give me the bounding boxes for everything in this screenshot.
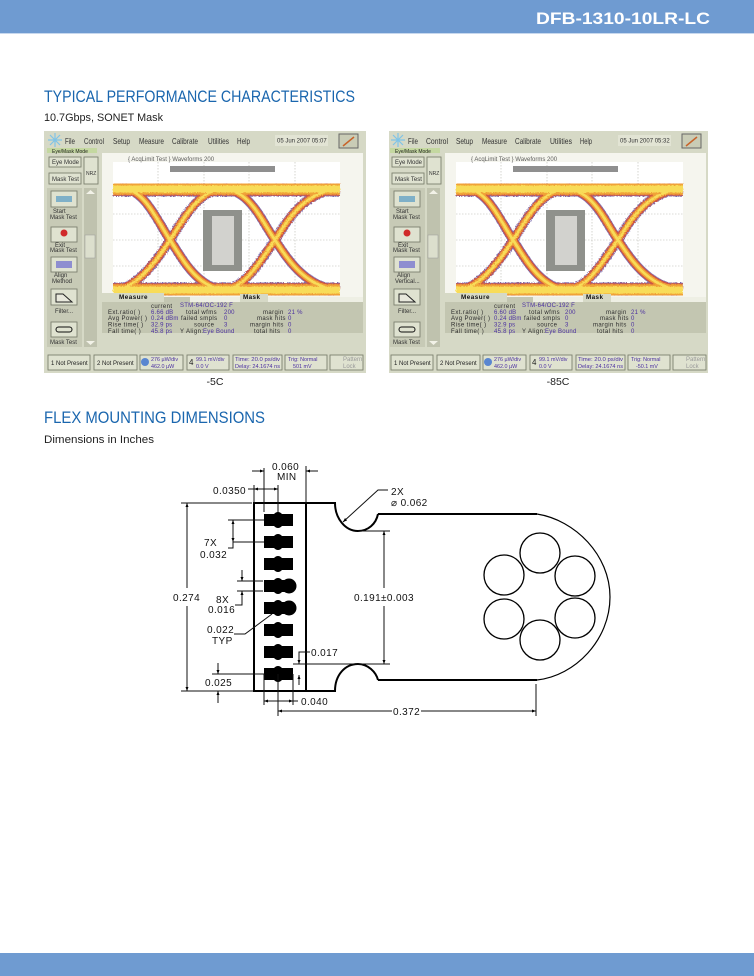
channel buttons: 4	[189, 358, 194, 367]
measurement panel: Avg Power( )	[451, 316, 490, 322]
measurement panel: 200	[224, 310, 235, 316]
measurement panel: 32.9 ps	[151, 322, 172, 328]
measurement panel: Measure	[461, 294, 490, 301]
channel buttons: Delay: 24.1674 ns	[235, 364, 280, 370]
measurement panel: 0	[288, 329, 292, 335]
icon: chart button	[339, 134, 358, 148]
channel buttons: 276 µW/div	[151, 357, 178, 363]
side controls: NRZ	[86, 171, 96, 177]
channel buttons: 1 Not Present	[394, 361, 431, 367]
dimension labels	[173, 462, 428, 718]
menu bar: Calibrate	[515, 136, 541, 146]
side controls: Mask Test	[395, 177, 422, 183]
dimension lines	[181, 466, 536, 716]
channel buttons: 276 µW/div	[494, 357, 521, 363]
solder pads	[264, 512, 296, 682]
measurement panel: 0	[631, 316, 635, 322]
measurement panel: 6.66 dB	[151, 310, 173, 316]
side controls	[390, 157, 441, 347]
measurement panel: 0.24 dBm	[151, 316, 179, 322]
heading: typical performance characteristics: TYPICAL PERFORMANCE CHARACTERISTICS	[44, 87, 355, 106]
date box	[618, 135, 671, 146]
channel buttons: Trig: Normal	[631, 357, 660, 363]
oscilloscope display	[102, 153, 363, 333]
icon: chart button	[682, 134, 701, 148]
dimension labels: 0.016	[208, 605, 235, 616]
side controls: Exit	[55, 243, 65, 249]
eye traces and mask	[456, 166, 683, 290]
dimension labels: 0.191±0.003	[354, 593, 414, 604]
mode tab: Eye/Mask Mode	[395, 149, 431, 155]
side controls: Align	[54, 273, 67, 279]
side controls: Filter...	[55, 309, 73, 315]
fiber circles	[484, 533, 595, 660]
dimension labels: 0.060	[272, 462, 299, 473]
measurement panel: failed smpls	[181, 316, 217, 322]
side controls: Start	[53, 209, 66, 215]
measurement panel	[445, 293, 706, 335]
measurement panel: 6.60 dB	[494, 310, 516, 316]
channel buttons: Trig: Normal	[288, 357, 317, 363]
date box: 05 Jun 2007 05:07	[277, 138, 327, 144]
caption: -5C: -5C	[207, 376, 224, 388]
flex outline	[254, 503, 610, 691]
measurement panel: Rise time( )	[451, 322, 486, 328]
eye traces and mask	[113, 166, 340, 290]
measurement panel: 0.24 dBm	[494, 316, 522, 322]
side controls: Eye Mode	[395, 160, 423, 166]
dimension labels: 2X	[391, 487, 404, 498]
channel buttons: Lock	[343, 364, 357, 370]
channel buttons: Pattern	[343, 357, 362, 363]
side controls: Start	[396, 209, 409, 215]
dimension arrowheads	[186, 470, 536, 712]
measurement panel: 45.8 ps	[151, 329, 172, 335]
measurement panel: Avg Power( )	[108, 316, 147, 322]
menu bar: Help	[237, 136, 250, 146]
channel buttons	[48, 355, 363, 370]
oscilloscope display: { AcqLimit Test } Waveforms 200	[128, 157, 215, 163]
channel buttons: Time: 20.0 ps/div	[235, 357, 280, 363]
measurement panel: source	[537, 322, 558, 328]
side controls: Mask Test	[393, 248, 420, 254]
dimension labels: 8X	[216, 595, 229, 606]
oscilloscope display	[445, 153, 706, 333]
measurement panel: 3	[565, 322, 569, 328]
side controls: Exit	[398, 243, 408, 249]
menu bar: Control	[84, 136, 104, 146]
measurement panel: 45.8 ps	[494, 329, 515, 335]
subheading: units: Dimensions in Inches	[44, 434, 155, 446]
channel buttons: Lock	[686, 364, 700, 370]
dimension labels: 0.0350	[213, 486, 246, 497]
dimension labels: MIN	[277, 472, 297, 483]
measurement panel: 21 %	[631, 310, 646, 316]
dimension labels: TYP	[212, 636, 233, 647]
scrollbar	[84, 188, 97, 347]
measurement panel: margin	[263, 310, 284, 316]
channel buttons: -50.1 mV	[636, 364, 658, 370]
measurement panel: 0	[224, 316, 228, 322]
measurement panel: Mask	[586, 294, 603, 301]
footer bar	[0, 953, 754, 976]
dimension labels: 0.040	[301, 697, 328, 708]
menu bar: Utilities	[550, 136, 572, 146]
measurement panel: 0	[288, 316, 292, 322]
menu bar: Setup	[456, 136, 473, 146]
dimension labels: 0.017	[311, 648, 338, 659]
measurement panel: 200	[565, 310, 576, 316]
side controls: Mask Test	[393, 340, 420, 346]
menu bar: Control	[426, 136, 448, 146]
channel buttons: 4	[532, 358, 537, 367]
measurement panel	[102, 293, 363, 335]
channel buttons: Time: 20.0 ps/div	[578, 357, 623, 363]
side controls: Mask Test	[50, 215, 77, 221]
channel buttons: 2 Not Present	[440, 361, 477, 367]
measurement panel: 21 %	[288, 310, 303, 316]
channel buttons: 462.0 µW	[151, 364, 175, 370]
heading: flex mounting dimensions: FLEX MOUNTING DIMENSIONS	[44, 408, 265, 427]
measurement panel: mask hits	[257, 316, 286, 322]
measurement panel: Ext.ratio( )	[451, 310, 483, 316]
channel buttons: 0.0 V	[196, 364, 209, 370]
menu bar: Setup	[113, 136, 130, 146]
side controls: Filter...	[398, 309, 416, 315]
measurement panel: Rise time( )	[108, 322, 143, 328]
menu bar: File	[65, 136, 75, 146]
mode tab: Eye/Mask Mode	[52, 149, 88, 155]
channel buttons: 2 Not Present	[97, 361, 134, 367]
panel: eye diagram at -85C	[389, 131, 708, 373]
measurement panel: Fall time( )	[451, 329, 484, 335]
menu bar: Measure	[482, 136, 507, 146]
measurement panel: current	[151, 304, 172, 310]
channel buttons: 0.0 V	[539, 364, 552, 370]
menu bar	[65, 136, 250, 146]
side controls: Align	[397, 273, 410, 279]
measurement panel: Eye Bound	[545, 329, 577, 335]
measurement panel: 0	[565, 316, 569, 322]
measurement panel: Ext.ratio( )	[108, 310, 140, 316]
dimension labels: 0.032	[200, 550, 227, 561]
measurement panel: total hits	[597, 329, 623, 335]
product title: DFB-1310-10LR-LC	[536, 10, 710, 28]
channel buttons: Pattern	[686, 357, 705, 363]
measurement panel: mask hits	[600, 316, 629, 322]
measurement panel: 3	[224, 322, 228, 328]
measurement panel: 0	[631, 322, 635, 328]
menu bar: Utilities	[208, 136, 229, 146]
side controls	[47, 157, 98, 347]
subheading: test conditions: 10.7Gbps, SONET Mask	[44, 112, 163, 124]
channel buttons: Delay: 24.1674 ns	[578, 364, 623, 370]
side controls: Vertical...	[395, 279, 420, 285]
measurement panel: margin hits	[250, 322, 284, 328]
measurement panel: Y Align:	[180, 329, 203, 335]
measurement panel: current	[494, 304, 515, 310]
mode tab	[47, 148, 97, 155]
measurement panel: Y Align:	[522, 329, 545, 335]
side controls: Mask Test	[50, 248, 77, 254]
measurement panel: total hits	[254, 329, 280, 335]
icon: sun logo	[391, 133, 405, 147]
measurement panel: Mask	[243, 294, 260, 301]
channel buttons: 501 mV	[293, 364, 312, 370]
dimension labels: 0.025	[205, 678, 232, 689]
dimension labels: 7X	[204, 538, 217, 549]
side controls: Mask Test	[50, 340, 77, 346]
side controls: NRZ	[429, 171, 439, 177]
measurement panel: Fall time( )	[108, 329, 141, 335]
measurement panel: 0	[631, 329, 635, 335]
measurement panel: Measure	[119, 294, 148, 301]
panel: eye diagram at -5C	[44, 131, 366, 373]
mode tab	[390, 148, 440, 155]
dimension labels: ⌀ 0.062	[391, 498, 428, 509]
measurement panel: 0	[288, 322, 292, 328]
measurement panel: total wfms	[186, 310, 217, 316]
icon: sun logo	[48, 133, 62, 147]
measurement panel: STM-64/OC-192 F	[180, 303, 233, 309]
measurement panel: margin hits	[593, 322, 627, 328]
measurement panel: failed smpls	[524, 316, 560, 322]
side controls: Method	[52, 279, 72, 285]
measurement panel: total wfms	[529, 310, 560, 316]
measurement panel: STM-64/OC-192 F	[522, 303, 575, 309]
dimension labels: 0.372	[393, 707, 420, 718]
date box: 05 Jun 2007 05:32	[620, 138, 670, 144]
channel buttons	[391, 355, 706, 370]
side controls: Mask Test	[393, 215, 420, 221]
caption: -85C: -85C	[547, 376, 570, 388]
menu bar: Help	[580, 136, 592, 146]
menu bar	[408, 136, 592, 146]
channel buttons: 462.0 µW	[494, 364, 518, 370]
measurement panel: Eye Bound	[203, 329, 235, 335]
channel buttons: 99.1 mV/div	[196, 357, 225, 363]
measurement panel: margin	[606, 310, 627, 316]
date box	[275, 135, 328, 146]
menu bar: Calibrate	[172, 136, 198, 146]
menu bar: Measure	[139, 136, 164, 146]
side controls: Mask Test	[52, 177, 79, 183]
dimension labels: 0.022	[207, 625, 234, 636]
channel buttons: 1 Not Present	[51, 361, 88, 367]
flex mounting drawing	[173, 462, 610, 718]
menu bar: File	[408, 136, 418, 146]
scrollbar	[427, 188, 440, 347]
measurement panel: 32.9 ps	[494, 322, 515, 328]
side controls: Eye Mode	[52, 160, 80, 166]
measurement panel: source	[194, 322, 215, 328]
channel buttons: 99.1 mV/div	[539, 357, 568, 363]
header bar	[0, 0, 754, 34]
oscilloscope display: { AcqLimit Test } Waveforms 200	[471, 157, 558, 163]
dimension labels: 0.274	[173, 593, 200, 604]
